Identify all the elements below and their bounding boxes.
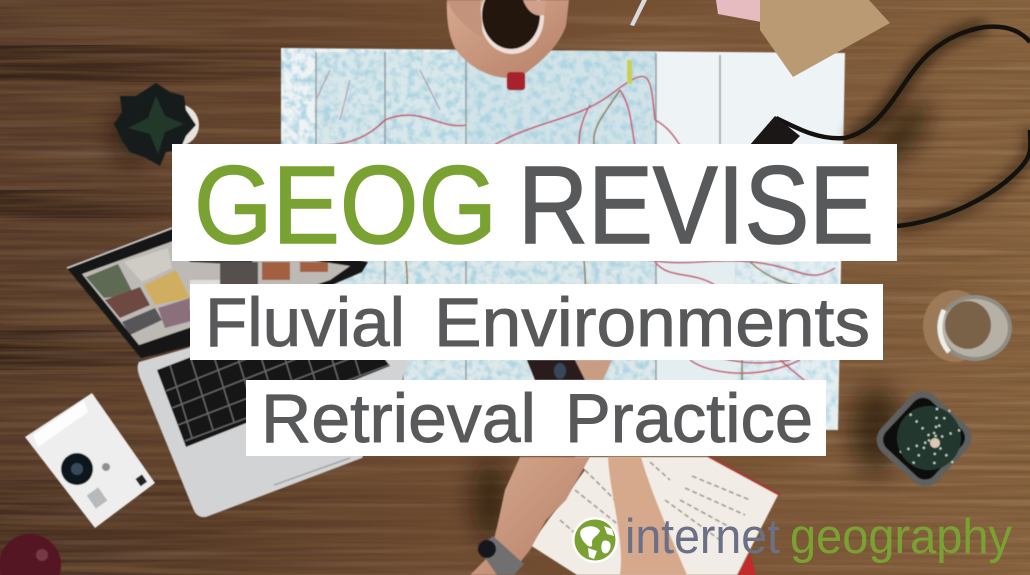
REVISE wordmark: REVISE — [518, 144, 874, 267]
logo: internet geography — [572, 510, 1012, 564]
pink note — [716, 0, 780, 24]
logo word: internet: internet — [625, 510, 780, 564]
icon: globe — [572, 517, 618, 563]
subtitle banner: Fluvial Environments — [190, 284, 883, 361]
pen — [630, 0, 647, 26]
laptop screen thumbnails — [86, 240, 328, 335]
hands holding coffee cup — [447, 0, 569, 90]
folded road map — [281, 48, 845, 430]
laptop trackpad line — [274, 458, 350, 485]
red apple — [0, 534, 61, 575]
kraft envelope — [760, 0, 890, 77]
wristwatch — [478, 536, 524, 575]
subtitle banner: Fluvial Environments: Fluvial — [205, 284, 405, 361]
subtitle banner: Fluvial Environments: Environments — [434, 284, 870, 361]
open notebook — [530, 456, 780, 575]
writing hand and forearm — [470, 457, 687, 575]
GEOG wordmark: GEOG — [194, 144, 497, 267]
title banner: GEOG REVISE — [172, 144, 897, 267]
black camera body — [749, 116, 800, 146]
fingers behind banner — [527, 360, 612, 380]
laptop base — [138, 295, 410, 517]
laptop screen — [67, 228, 368, 358]
logo word: geography: geography — [790, 510, 1012, 564]
succulent plant — [114, 83, 199, 166]
laptop — [67, 228, 410, 517]
camera strap with shadow — [776, 27, 1030, 226]
glass on coaster — [923, 290, 1012, 362]
potted cactus — [870, 384, 978, 493]
white instant camera — [25, 393, 155, 528]
laptop keyboard — [157, 300, 390, 447]
subtitle banner: Retrieval Practice — [246, 380, 826, 457]
subtitle banner: Retrieval Practice: Retrieval — [261, 380, 536, 457]
subtitle banner: Retrieval Practice: Practice — [565, 380, 813, 457]
shadows on table — [114, 93, 940, 540]
